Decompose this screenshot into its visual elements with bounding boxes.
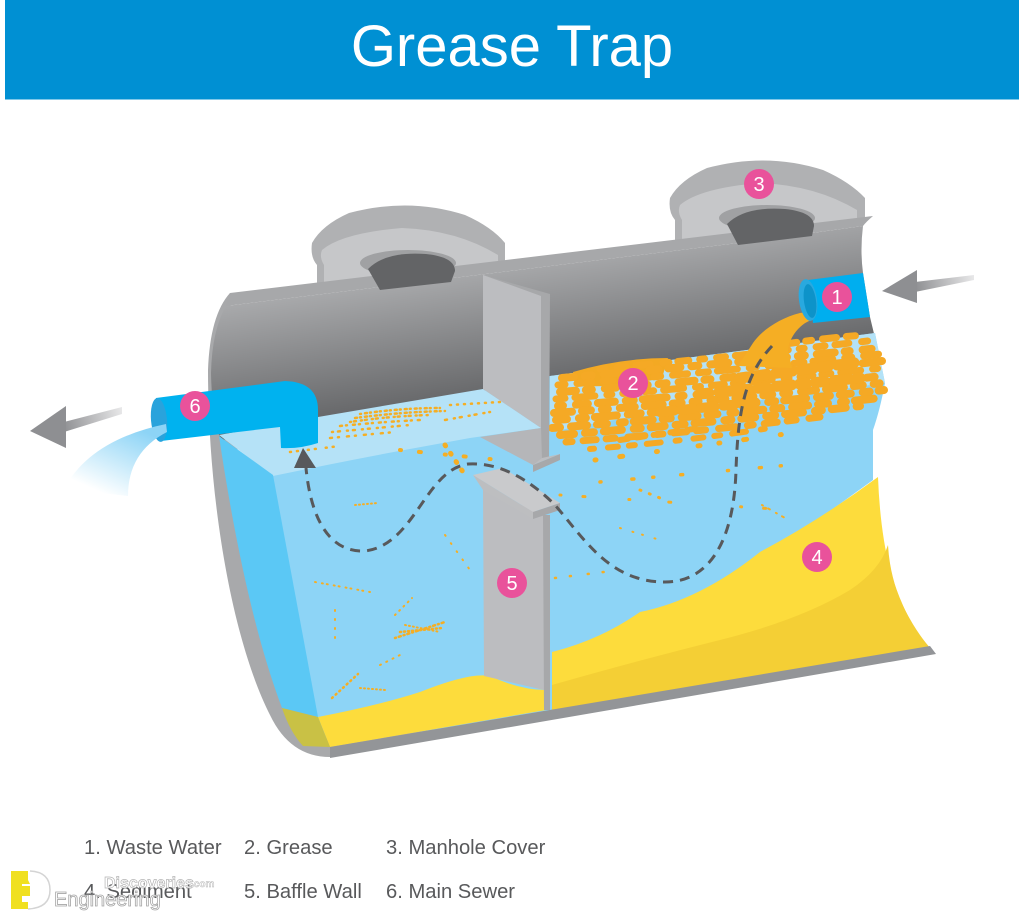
marker 1 [822,282,852,312]
legend: 5. Baffle Wall [244,881,362,903]
manhole cover left [312,205,505,285]
title banner [5,0,1019,100]
dashed flow path with arrow [294,346,772,582]
legend: 4. Sediment [84,881,192,903]
grease slick right chamber [552,335,884,449]
sediment corner olive [282,708,330,747]
sediment left [318,675,546,747]
marker 3 [744,169,774,199]
arrow: inflow [882,270,974,303]
marker 3: 3 [753,174,765,196]
legend: 6. Main Sewer [386,881,515,903]
marker 6: 6 [189,396,201,418]
manhole opening right [727,209,814,245]
marker 6 [180,391,210,421]
upper baffle wall [480,275,560,472]
watermark logo: Engineering [54,889,161,911]
arrow: outflow [30,406,122,448]
grease specks right chamber [555,432,800,578]
inlet pipe [796,273,870,323]
grease specks left chamber [290,402,500,698]
legend [84,837,546,903]
legend: 1. Waste Water [84,837,222,859]
manhole opening left [368,254,455,290]
title banner: Grease Trap [351,14,673,79]
marker 2 [618,368,648,398]
watermark logo: Discoveries [104,875,194,892]
water body [272,333,885,745]
main sewer pipe [149,381,318,448]
watermark logo [11,871,214,911]
manhole cover right [670,160,865,240]
tank rim [226,216,873,306]
marker 4: 4 [811,547,823,569]
tank inner wall [211,226,876,440]
legend: 2. Grease [244,837,333,859]
tank outer shell [208,293,935,757]
legend: 3. Manhole Cover [386,837,546,859]
outflow water [64,424,167,496]
water side face left [219,436,318,717]
grease outflow stream [738,311,815,368]
marker 2: 2 [627,373,639,395]
marker 5: 5 [506,573,518,595]
water surface right chamber [550,333,885,432]
marker 4 [802,542,832,572]
marker 1: 1 [831,287,843,309]
lower baffle wall [473,468,560,710]
sediment right [552,477,930,710]
watermark logo: .com [191,879,214,890]
marker 5 [497,568,527,598]
water surface left chamber [219,389,541,476]
tank floor strip [330,646,936,758]
